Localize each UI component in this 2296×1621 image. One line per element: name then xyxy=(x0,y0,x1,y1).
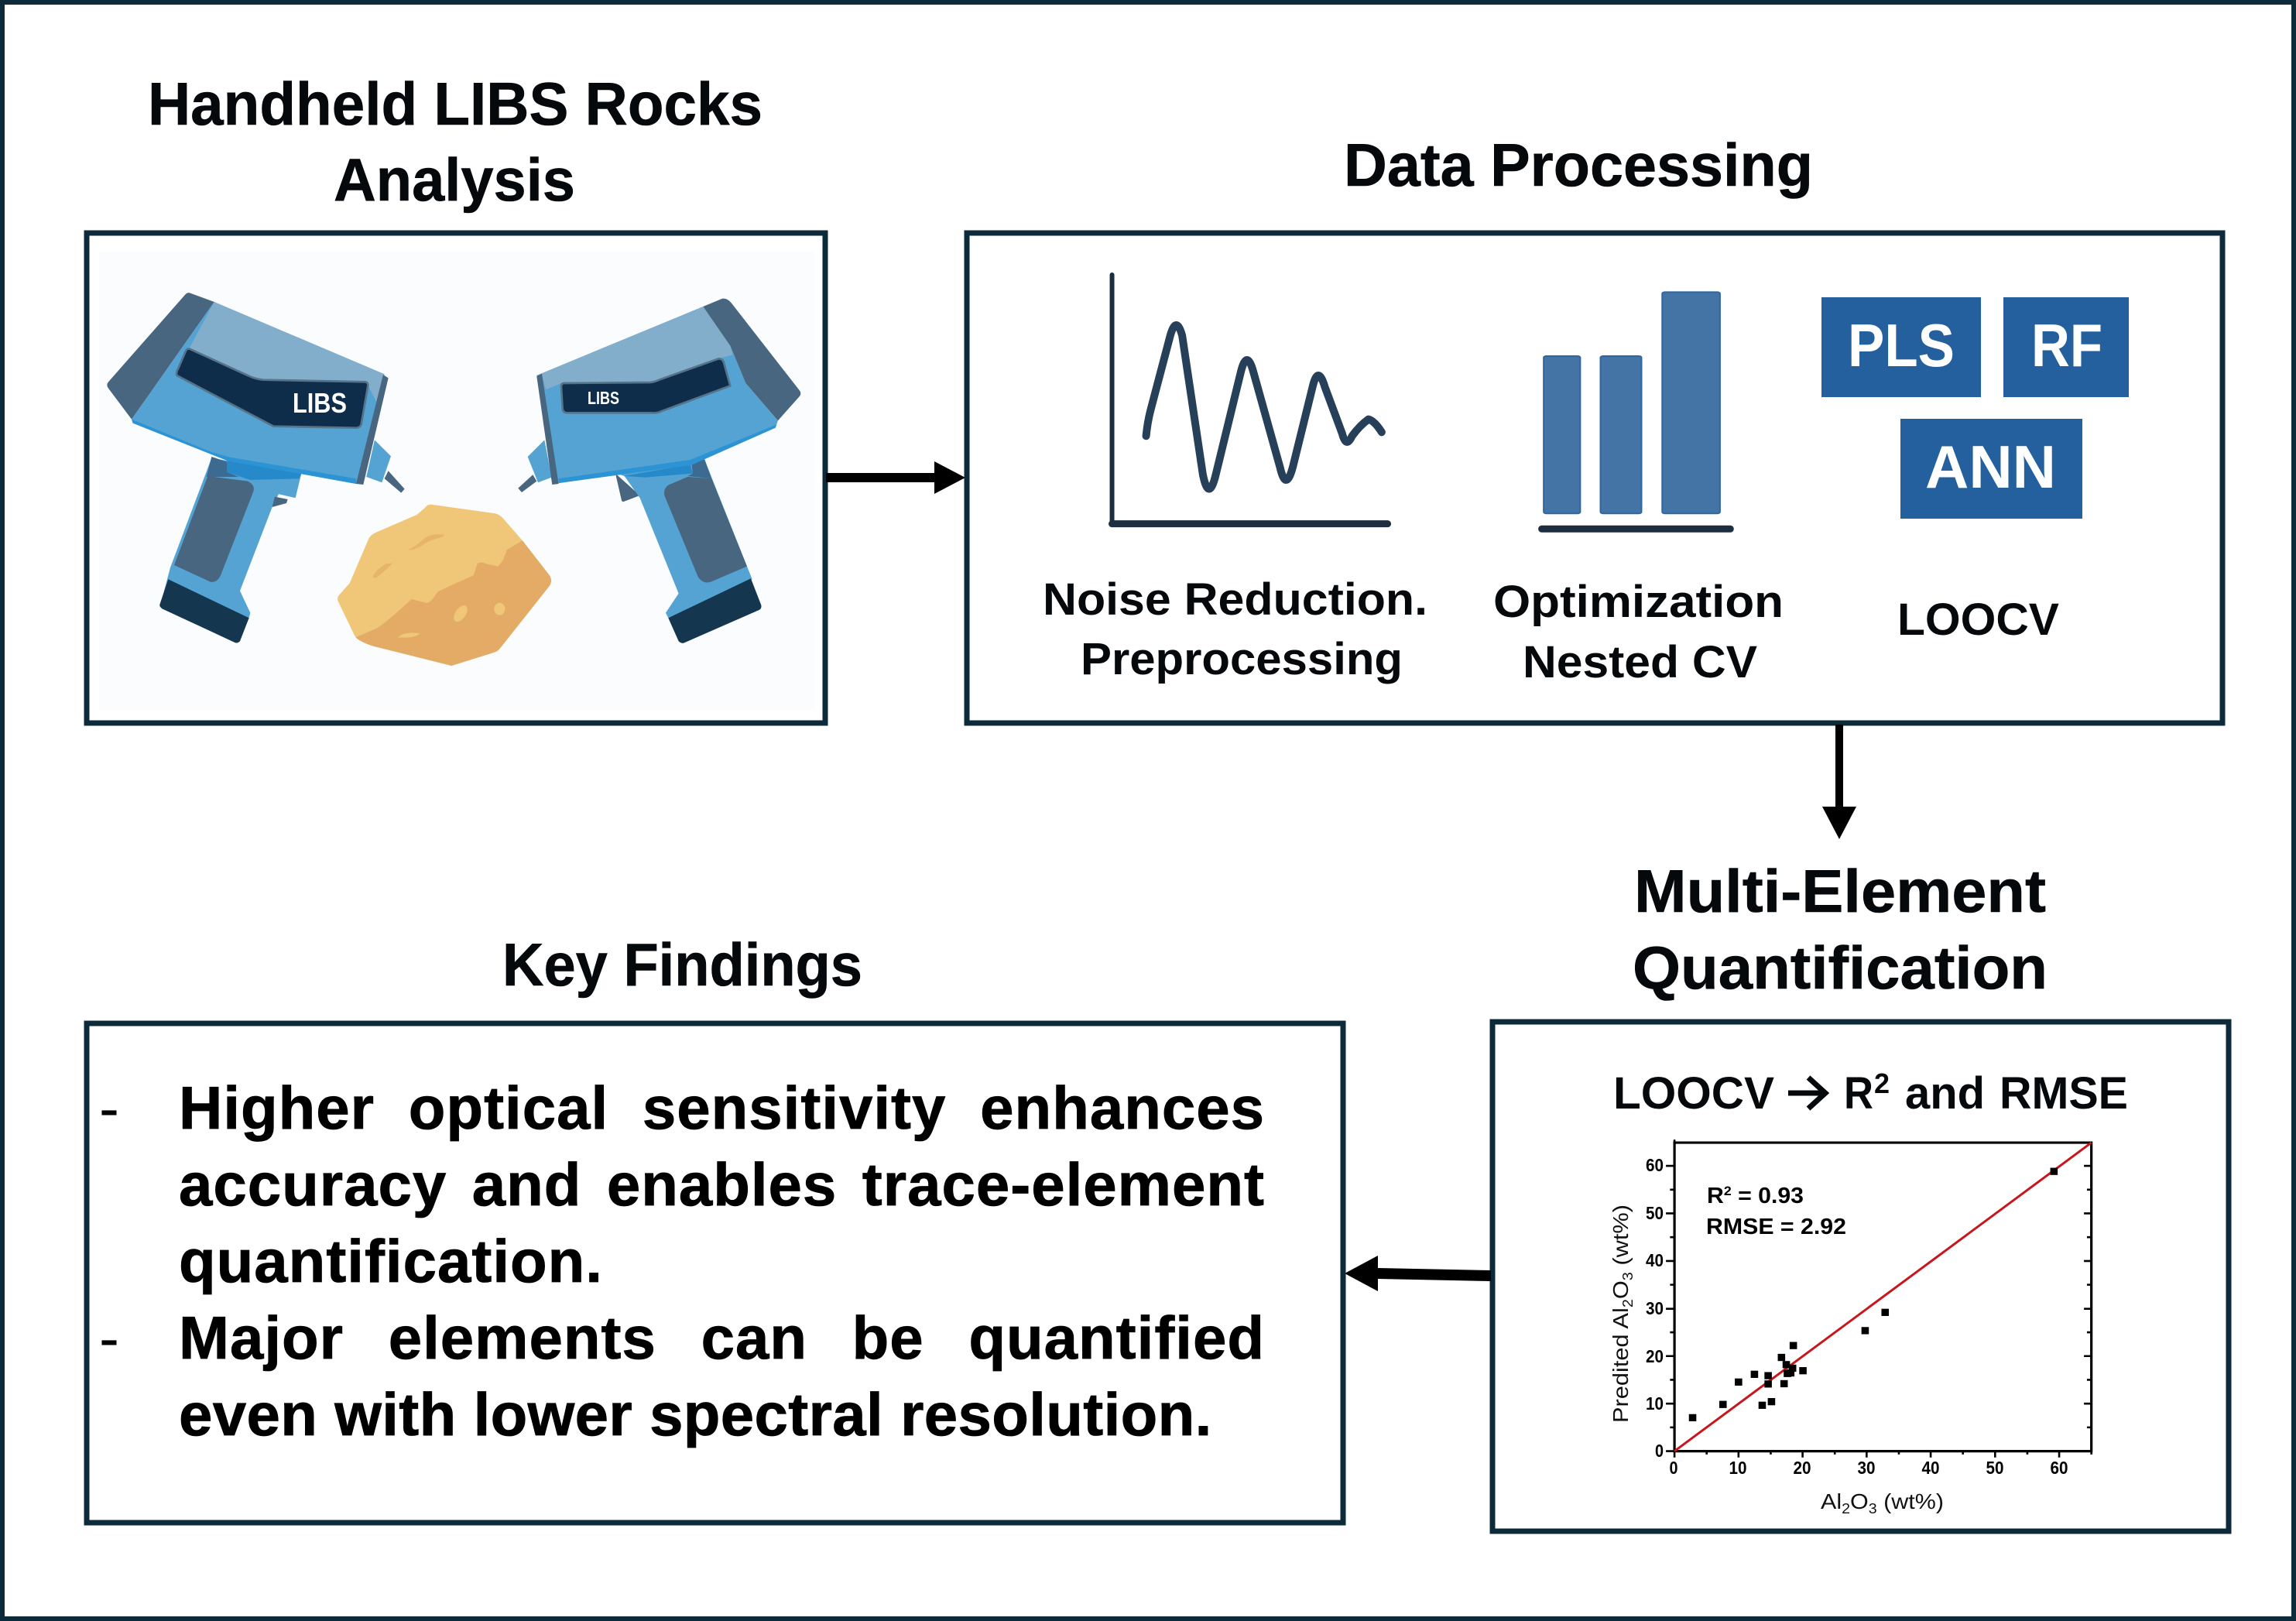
label: Noise Reduction. Preprocessing xyxy=(1043,574,1427,684)
scatter plot: predicted vs actual Al2O3: 10 xyxy=(1646,1393,1664,1414)
scatter plot: predicted vs actual Al2O3: 3 xyxy=(1869,1501,1877,1516)
key findings text: - xyxy=(99,1074,119,1142)
heading: Multi-Element Quantification: Quantification xyxy=(1633,934,2048,1002)
scatter plot: predicted vs actual Al2O3: RMSE = 2.92 xyxy=(1706,1215,1846,1239)
panel title: LOOCV to R2 and RMSE: 2 xyxy=(1874,1068,1890,1099)
scatter plot: predicted vs actual Al2O3: 40 xyxy=(1921,1458,1940,1478)
icon: right LIBS gun xyxy=(518,299,800,643)
scatter plot: predicted vs actual Al2O3: Al xyxy=(1821,1489,1840,1513)
key findings text: - xyxy=(99,1304,119,1372)
panel: data processing xyxy=(967,233,2222,723)
panel title: LOOCV to R2 and RMSE: R xyxy=(1844,1068,1873,1119)
key findings text: quantification. xyxy=(179,1227,603,1295)
panel title: LOOCV to R2 and RMSE: LOOCV xyxy=(1613,1068,1774,1119)
key findings text: even with lower spectral resolution. xyxy=(179,1380,1212,1448)
scatter plot: predicted vs actual Al2O3: 0 xyxy=(1669,1458,1678,1478)
label: LOOCV: LOOCV xyxy=(1897,595,2059,645)
scatter plot: predicted vs actual Al2O3: 2 xyxy=(1842,1501,1850,1516)
scatter plot: predicted vs actual Al2O3: (wt%) xyxy=(1877,1489,1944,1513)
scatter plot: predicted vs actual Al2O3: 2 xyxy=(1724,1184,1732,1198)
panel title: LOOCV to R2 and RMSE: RMSE xyxy=(2000,1068,2128,1119)
scatter plot: predicted vs actual Al2O3 xyxy=(1609,1139,2092,1516)
scatter plot: predicted vs actual Al2O3: 60 xyxy=(1646,1155,1664,1175)
arrow: gun panel to data processing xyxy=(826,461,965,494)
model tag: PLS xyxy=(1821,297,1981,397)
label: Optimization Nested CV: Nested CV xyxy=(1523,637,1757,687)
title: Handheld LIBS Rocks Analysis: Analysis xyxy=(334,146,575,214)
heading: Multi-Element Quantification xyxy=(1633,857,2048,1002)
label: Optimization Nested CV: Optimization xyxy=(1493,577,1784,627)
model tag: ANN xyxy=(1900,419,2082,519)
scatter plot: predicted vs actual Al2O3: 20 xyxy=(1646,1346,1664,1366)
arrow: data processing to quantification xyxy=(1822,725,1856,839)
scatter plot: predicted vs actual Al2O3: (wt%) xyxy=(1609,1205,1633,1272)
panel: key findings box xyxy=(87,1023,1343,1523)
icon: right LIBS gun: LIBS xyxy=(588,388,619,408)
key findings text: Higher optical sensitivity enhances xyxy=(179,1074,1265,1142)
scatter plot: predicted vs actual Al2O3: 40 xyxy=(1646,1250,1664,1270)
panel: handheld LIBS illustration xyxy=(87,233,825,723)
scatter plot: predicted vs actual Al2O3: 10 xyxy=(1729,1458,1746,1478)
scatter plot: predicted vs actual Al2O3: 30 xyxy=(1858,1458,1875,1478)
heading: Key Findings: Key Findings xyxy=(502,930,862,999)
title: Handheld LIBS Rocks Analysis xyxy=(148,70,762,214)
scatter plot: predicted vs actual Al2O3: O xyxy=(1850,1489,1869,1513)
icon: noisy spectrum chart xyxy=(1112,275,1388,524)
scatter plot: predicted vs actual Al2O3: 0 xyxy=(1655,1441,1664,1461)
label: Noise Reduction. Preprocessing: Preprocessing xyxy=(1081,634,1403,684)
icon: rock xyxy=(338,505,551,666)
scatter plot: predicted vs actual Al2O3: 20 xyxy=(1793,1458,1811,1478)
label: Optimization Nested CV xyxy=(1493,577,1784,687)
key findings text: Major elements can be quantified xyxy=(179,1304,1265,1372)
scatter plot: predicted vs actual Al2O3: 60 xyxy=(2050,1458,2068,1478)
scatter plot: predicted vs actual Al2O3: 3 xyxy=(1620,1272,1636,1280)
icon: bar chart xyxy=(1542,292,1730,529)
model tag: RF xyxy=(2003,297,2129,397)
key findings text: accuracy and enables trace-element xyxy=(179,1150,1265,1218)
scatter plot: predicted vs actual Al2O3: 50 xyxy=(1646,1203,1664,1223)
panel: multi-element quantification xyxy=(1492,1022,2229,1531)
icon: left LIBS gun xyxy=(107,293,405,643)
heading: Multi-Element Quantification: Multi-Element xyxy=(1634,857,2046,925)
panel title: LOOCV to R2 and RMSE: and xyxy=(1905,1068,1985,1119)
scatter plot: predicted vs actual Al2O3: 2 xyxy=(1620,1299,1636,1307)
scatter plot: predicted vs actual Al2O3: R xyxy=(1707,1184,1723,1208)
scatter plot: predicted vs actual Al2O3: 30 xyxy=(1646,1298,1664,1318)
scatter plot: predicted vs actual Al2O3: 50 xyxy=(1986,1458,2003,1478)
model tag: ANN: ANN xyxy=(1925,433,2056,501)
model tag: RF: RF xyxy=(2031,311,2102,379)
scatter plot: predicted vs actual Al2O3: = 0.93 xyxy=(1732,1184,1804,1208)
heading: Data Processing: Data Processing xyxy=(1344,131,1813,199)
icon: left LIBS gun: LIBS xyxy=(293,387,347,419)
arrow: quantification to key findings xyxy=(1345,1256,1491,1291)
panel title: LOOCV to R2 and RMSE xyxy=(1613,1068,2128,1119)
model tag: PLS: PLS xyxy=(1848,311,1955,379)
label: Noise Reduction. Preprocessing: Noise Reduction. xyxy=(1043,574,1427,625)
title: Handheld LIBS Rocks Analysis: Handheld LIBS Rocks xyxy=(148,70,762,138)
scatter plot: predicted vs actual Al2O3: O xyxy=(1609,1280,1633,1299)
scatter plot: predicted vs actual Al2O3: Predited Al xyxy=(1609,1318,1633,1423)
key findings text xyxy=(99,1074,1265,1448)
